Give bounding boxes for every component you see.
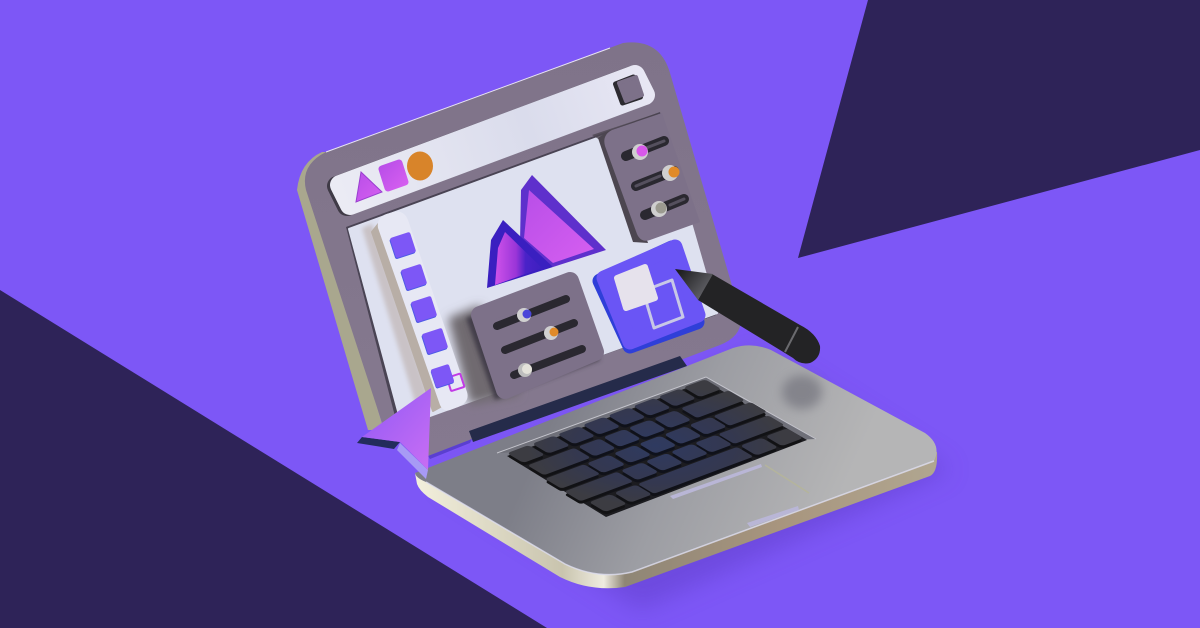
top bar [340, 75, 645, 205]
panel shadow [466, 282, 600, 400]
slider 1 [497, 299, 566, 326]
bottom slider panel [466, 281, 600, 400]
slider 3 [645, 199, 684, 217]
keyboard edge lines [497, 377, 816, 453]
square 1 [389, 232, 417, 259]
dark shape: top right [798, 0, 1200, 258]
pen shadow on base [782, 375, 822, 409]
outlined square [447, 374, 464, 391]
image triangles [487, 175, 606, 288]
base rim highlight [426, 461, 934, 575]
square 3 [410, 296, 438, 323]
base top surface [415, 345, 937, 575]
pen cone [675, 269, 713, 300]
dark shape: bottom left [0, 290, 547, 628]
small triangle [487, 220, 553, 288]
sidebar squares [389, 232, 464, 391]
slider 3 [514, 349, 582, 377]
icon: square button shadow [616, 77, 640, 103]
icon: square button [619, 77, 642, 101]
square 5 [430, 364, 455, 389]
card side [600, 248, 697, 346]
layers card [600, 247, 698, 346]
outlined square [643, 280, 683, 328]
arrow face [362, 388, 431, 470]
large triangle [520, 175, 606, 267]
content panel shadow [346, 112, 716, 428]
lid face [305, 42, 741, 456]
keyboard well [507, 381, 807, 517]
laptop base [415, 345, 937, 588]
shadow behind bottom panel [448, 305, 520, 405]
top bar shadow [337, 76, 642, 206]
icon: orange circle [407, 152, 433, 180]
keyboard [497, 377, 816, 517]
stylus pen [675, 269, 820, 363]
lid top highlight [326, 48, 610, 152]
arrow dark side [357, 437, 400, 449]
laptop drop shadow [440, 350, 950, 610]
key sides [503, 380, 808, 517]
panel face [604, 113, 700, 241]
icon: triangle [356, 172, 382, 202]
slider 1 [626, 141, 664, 160]
lid back edge [297, 152, 384, 430]
slider 2 [505, 323, 574, 350]
hinge lower strip [428, 439, 472, 459]
card face [604, 247, 698, 342]
hinge band [469, 356, 687, 442]
pen body [698, 274, 820, 363]
back page [372, 222, 442, 411]
sidebar body [378, 212, 468, 410]
top-right slider panel [592, 113, 700, 243]
arrow lavender side [397, 443, 428, 479]
slider 2 [636, 165, 680, 186]
white square [617, 267, 655, 308]
square 4 [421, 328, 449, 355]
panel face [480, 281, 595, 390]
trackpad edges [670, 464, 809, 527]
laptop lid [297, 42, 820, 479]
square 2 [400, 264, 428, 291]
pen ring [785, 327, 798, 352]
content panel [349, 115, 717, 426]
cursor arrow [357, 388, 431, 479]
base side edge [415, 452, 937, 588]
keys [503, 377, 808, 514]
sidebar panel [378, 212, 468, 410]
panel shade above [592, 113, 660, 140]
icon: rounded square [382, 163, 405, 188]
panel side [598, 130, 648, 243]
left strip shade [362, 224, 432, 412]
